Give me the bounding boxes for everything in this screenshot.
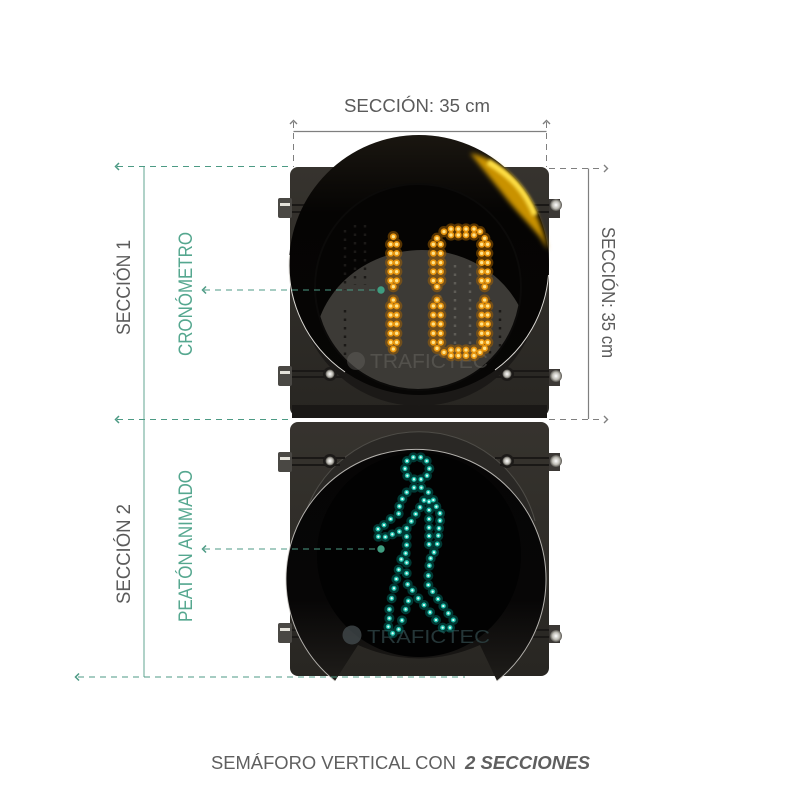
top width dashed guides: [294, 122, 546, 167]
timer leader line: [204, 289, 381, 291]
lens ring 2: [303, 432, 535, 521]
visor 2: [286, 449, 546, 681]
caption regular text: SEMÁFORO VERTICAL CON: [211, 753, 456, 773]
dimension: left sections: [76, 163, 465, 680]
traffic light section 1: countdown timer: [278, 135, 562, 418]
watermark 2: TRAFICTEC: [367, 627, 490, 647]
pedestrian leader line: [204, 548, 381, 550]
label: right section height: SECCIÓN: 35 cm: [598, 227, 619, 358]
housing 2: [290, 422, 549, 676]
visor 1: [289, 135, 549, 395]
right height dashed guides: [549, 168, 604, 420]
visor 1 lit rim: [289, 255, 548, 372]
timer dot: [377, 286, 385, 294]
section guide lines: [78, 166, 465, 677]
pedestrian arrow head: [202, 546, 206, 552]
lens 1: [320, 225, 518, 389]
label: top section width: SECCIÓN: 35 cm: [344, 95, 490, 116]
label: animated pedestrian: PEATÓN ANIMADO: [175, 470, 197, 622]
pedestrian dot: [377, 545, 385, 553]
traffic light section 2: walking pedestrian: [278, 422, 562, 681]
callout: animated pedestrian: [202, 545, 385, 553]
housing 1: [290, 167, 549, 416]
watermark 1: TRAFICTEC: [370, 351, 488, 373]
caption: [211, 753, 590, 773]
top width line: [294, 130, 546, 132]
right height arrow heads: [604, 165, 608, 423]
countdown digits: 10: [391, 229, 488, 356]
dimension: right height: [549, 165, 608, 423]
lens 2: [317, 453, 521, 657]
base of housing 1: [292, 405, 547, 418]
mounting brackets 2: [278, 452, 562, 643]
label: timer: CRONÓMETRO: [175, 232, 197, 356]
timer arrow head: [202, 286, 206, 294]
walking pedestrian figure: [378, 457, 453, 633]
infographic: pedestrian traffic light: [74, 96, 618, 769]
callout: timer: [202, 286, 385, 294]
caption bold text: 2 SECCIONES: [464, 753, 590, 773]
sections vertical line: [143, 166, 145, 677]
mounting brackets 1: [278, 198, 562, 386]
visor 2 rim: [286, 449, 546, 681]
dimension: top width: [290, 120, 550, 167]
lens ring 1: [298, 164, 540, 406]
right height line: [588, 168, 590, 419]
watermark 2: [342, 626, 490, 647]
visor reflection: [470, 153, 548, 250]
section arrow heads: [76, 163, 119, 680]
label: section 1: SECCIÓN 1: [113, 240, 135, 335]
lens 1 rim: [315, 184, 521, 390]
label: section 2: SECCIÓN 2: [113, 504, 135, 604]
top width arrow heads: [290, 120, 550, 124]
